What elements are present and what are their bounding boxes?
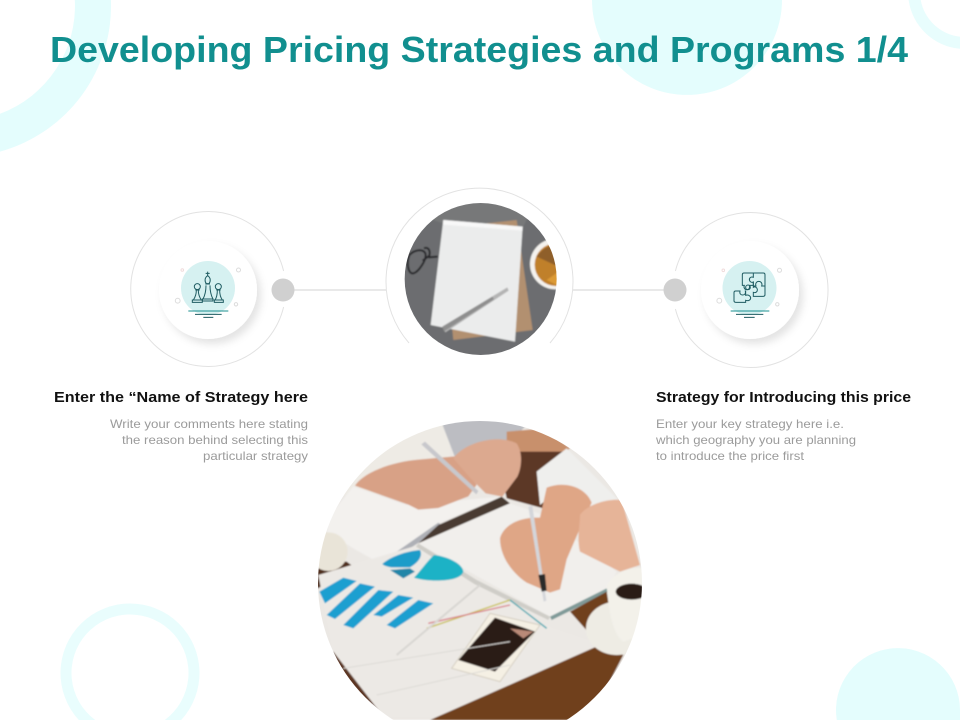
- heading left: Enter the “Name of Strategy here: [54, 390, 308, 406]
- outer ring left: [131, 212, 284, 366]
- inner white disc right: [701, 241, 799, 339]
- icon: chess pieces: [188, 272, 228, 317]
- body left: Write your comments here stating: [110, 417, 308, 431]
- icon: puzzle pieces: [731, 273, 769, 317]
- body right: [655, 417, 856, 463]
- body left: [110, 417, 308, 463]
- body right: Enter your key strategy here i.e.: [656, 417, 844, 431]
- connector dot left: [272, 278, 294, 302]
- connector dot right: [664, 278, 686, 302]
- heading right: Strategy for Introducing this price: [656, 390, 911, 406]
- connector lines: [294, 289, 664, 291]
- body left: the reason behind selecting this: [122, 433, 308, 447]
- outer ring right: [675, 213, 828, 368]
- body left: particular strategy: [203, 449, 308, 463]
- small decorative dots right: [717, 268, 782, 306]
- teal disc left: [181, 261, 235, 315]
- left node: chess strategy: [131, 212, 294, 366]
- inner white disc left: [159, 241, 257, 339]
- outer ring centre: [386, 188, 573, 343]
- photo: notepad on desk: [404, 203, 557, 355]
- body right: to introduce the price first: [656, 449, 805, 463]
- text block: right strategy: [655, 390, 911, 463]
- teal disc right: [722, 261, 776, 315]
- right node: puzzle strategy: [664, 213, 828, 368]
- text block: left strategy: [54, 390, 308, 463]
- title: Developing Pricing Strategies and Programs 1/4: [50, 29, 908, 70]
- small decorative dots left: [175, 268, 240, 306]
- body right: which geography you are planning: [655, 433, 856, 447]
- centre node: notepad photo: [386, 188, 581, 360]
- photo: hands working on charts: [318, 421, 642, 720]
